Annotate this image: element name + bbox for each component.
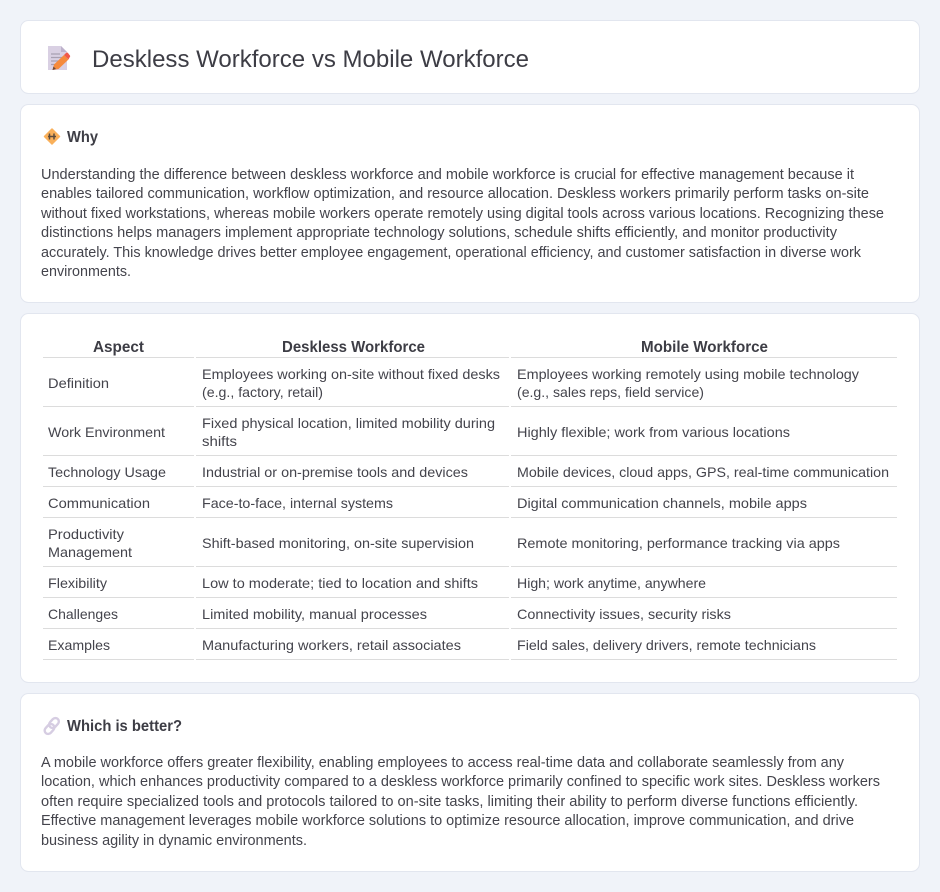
row: challenges: Challenges <box>48 606 118 622</box>
heading: which is better: Which is better? <box>67 718 182 735</box>
row: communication: Face-to-face, internal systems <box>202 495 393 511</box>
row: productivity management <box>48 526 840 560</box>
text block: which is better paragraph: business agility in dynamic environments. <box>41 833 307 849</box>
text block: why paragraph <box>40 167 884 280</box>
row: technology usage: Technology Usage <box>48 464 166 480</box>
row: work environment <box>48 415 790 449</box>
icon: warning diamond <box>44 129 60 144</box>
row: technology usage <box>48 464 889 480</box>
title: Deskless Workforce vs Mobile Workforce <box>92 46 529 73</box>
row: challenges: Connectivity issues, security risks <box>517 606 731 622</box>
row: flexibility: High; work anytime, anywhere <box>517 575 706 591</box>
heading: why: Why <box>67 129 98 146</box>
table header row: Aspect <box>93 339 145 356</box>
table header row: Mobile Workforce <box>641 339 768 356</box>
row: productivity management: Productivity <box>48 526 124 542</box>
panel: which is better <box>20 694 920 872</box>
row: flexibility <box>48 575 706 591</box>
row: challenges: Limited mobility, manual processes <box>202 606 427 622</box>
text block: which is better paragraph: often require specialized tools and protocols tailored to on-site tasks, limiting their ability to perform diverse functions efficiently. <box>41 794 858 810</box>
row: examples: Field sales, delivery drivers, remote technicians <box>517 637 816 653</box>
row: examples: Manufacturing workers, retail associates <box>202 637 461 653</box>
table header row <box>93 339 768 356</box>
row: work environment: Highly flexible; work from various locations <box>517 424 790 440</box>
row: examples <box>48 637 816 653</box>
row: work environment: Work Environment <box>48 424 165 440</box>
row: work environment: shifts <box>202 433 237 449</box>
panel: comparison table <box>20 314 920 682</box>
panel: why <box>20 104 920 302</box>
text block: which is better paragraph: location, which enhances productivity compared to a deskless workforce primarily confined to specific work sites. Deskless workers <box>41 774 880 790</box>
text block: which is better paragraph: Effective management leverages mobile workforce solutions to optimize resource allocation, improve communication, and drive <box>41 813 854 829</box>
icon: chain link <box>43 717 60 735</box>
row: challenges <box>48 606 731 622</box>
panel: header <box>20 20 920 94</box>
text block: which is better paragraph <box>41 755 880 849</box>
icon: document with pencil <box>48 46 70 70</box>
table header row: Deskless Workforce <box>282 339 425 356</box>
text block: why paragraph: accurately. This knowledge drives better employee engagement, operational efficiency, and customer satisfaction in diverse work <box>41 245 862 261</box>
row: technology usage: Industrial or on-premise tools and devices <box>202 464 468 480</box>
row: technology usage: Mobile devices, cloud apps, GPS, real-time communication <box>517 464 889 480</box>
row: definition: Employees working on-site without fixed desks <box>202 366 500 382</box>
row: examples: Examples <box>48 637 110 653</box>
text block: which is better paragraph: A mobile workforce offers greater flexibility, enabling employees to access real-time data and collaborate seamlessly from any <box>41 755 845 771</box>
row: definition <box>48 366 859 400</box>
row: flexibility: Flexibility <box>48 575 107 591</box>
text block: why paragraph: Understanding the difference between deskless workforce and mobile workforce is crucial for effective management because it <box>41 167 854 183</box>
row: productivity management: Management <box>48 544 132 560</box>
row: communication: Digital communication channels, mobile apps <box>517 495 807 511</box>
text block: why paragraph: enables tailored communication, workflow optimization, and resource allocation. Deskless workers primarily perform tasks on-site <box>41 186 869 202</box>
text block: why paragraph: environments. <box>41 264 131 280</box>
text block: why paragraph: without fixed workstations, whereas mobile workers operate remotely using digital tools across various locations. Recognizing these <box>40 206 884 222</box>
row: productivity management: Shift-based monitoring, on-site supervision <box>202 535 474 551</box>
row: definition: (e.g., factory, retail) <box>202 384 323 400</box>
row: definition: (e.g., sales reps, field service) <box>517 384 704 400</box>
row: productivity management: Remote monitoring, performance tracking via apps <box>517 535 840 551</box>
row: definition: Employees working remotely using mobile technology <box>517 366 859 382</box>
row: communication: Communication <box>48 495 150 511</box>
row: definition: Definition <box>48 375 109 391</box>
text block: why paragraph: distinctions helps managers implement appropriate technology solutions, schedule shifts efficiently, and monitor productivity <box>41 225 838 241</box>
row: flexibility: Low to moderate; tied to location and shifts <box>202 575 478 591</box>
row: work environment: Fixed physical location, limited mobility during <box>202 415 495 431</box>
row: communication <box>48 495 807 511</box>
